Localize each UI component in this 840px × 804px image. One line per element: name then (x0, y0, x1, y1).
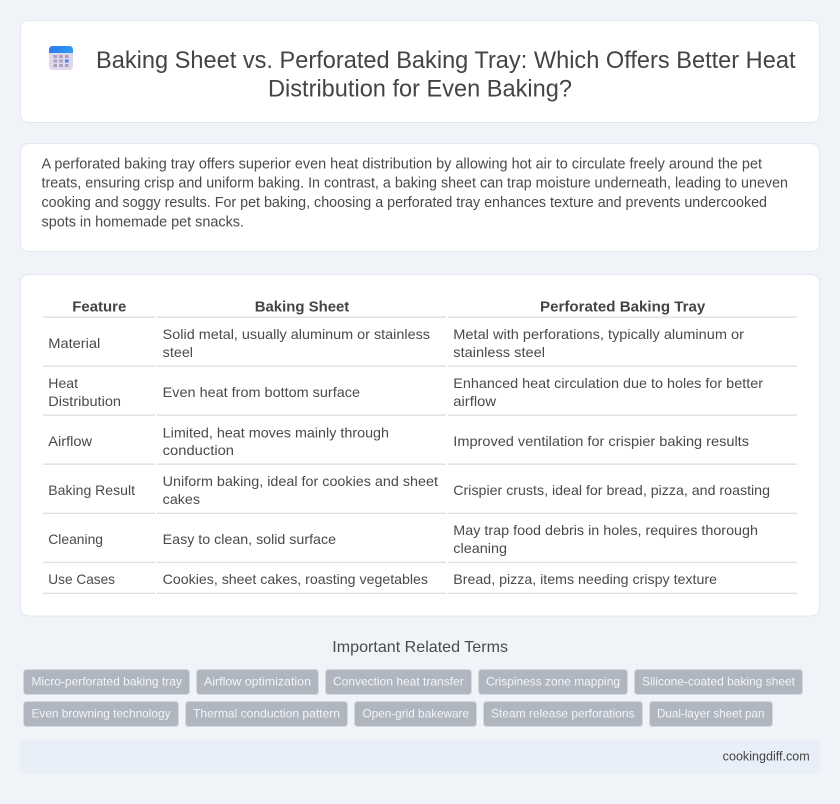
panel: intro paragraph: cooking and soggy results. For pet baking, choosing a perforated tray enhances texture and prevents undercooked (42, 195, 767, 211)
row: heat distribution: Heat (48, 375, 78, 391)
row: material: Solid metal, usually aluminum or stainless (163, 326, 430, 342)
related term tags (24, 670, 802, 726)
related term tags: Thermal conduction pattern (193, 707, 340, 721)
title (96, 47, 796, 102)
row: heat distribution: airflow (453, 393, 497, 409)
row: airflow: conduction (163, 442, 234, 458)
panel: intro paragraph: spots in homemade pet snacks. (42, 214, 244, 230)
row: baking result (48, 473, 770, 507)
table header row: Baking Sheet (255, 299, 349, 316)
panel: intro paragraph: A perforated baking tray offers superior even heat distribution by allowing hot air to circulate freely around the pet (42, 156, 762, 172)
table header row: Feature (72, 299, 126, 316)
title: Baking Sheet vs. Perforated Baking Tray: Which Offers Better Heat (96, 47, 796, 74)
row: heat distribution: Even heat from bottom surface (163, 384, 360, 400)
table header row (72, 299, 706, 316)
row: heat distribution (48, 375, 763, 409)
row: heat distribution: Distribution (48, 393, 121, 409)
row: use cases: Bread, pizza, items needing crispy texture (453, 571, 717, 587)
row: material: stainless steel (453, 344, 545, 360)
row: airflow: Improved ventilation for crispier baking results (453, 433, 749, 449)
related term tags: Micro-perforated baking tray (32, 675, 182, 689)
related term tags: Silicone-coated baking sheet (642, 675, 796, 689)
related term tags: Open-grid bakeware (362, 707, 469, 721)
row: baking result: Crispier crusts, ideal for bread, pizza, and roasting (453, 482, 770, 498)
row: cleaning: cleaning (453, 540, 507, 556)
row: cleaning: Cleaning (48, 531, 103, 547)
related term tags: Crispiness zone mapping (486, 675, 620, 689)
row: heat distribution: Enhanced heat circulation due to holes for better (453, 375, 763, 391)
row: use cases (48, 571, 717, 587)
footer bar: cookingdiff.com (723, 750, 810, 764)
related term tags: Dual-layer sheet pan (657, 707, 764, 721)
related term tags: Steam release perforations (491, 707, 634, 721)
row: baking result: cakes (163, 491, 200, 507)
row: airflow (48, 424, 749, 458)
heading: important related terms: Important Related Terms (332, 639, 508, 656)
footer bar (20, 740, 820, 774)
icon: calendar (49, 46, 73, 70)
row: material: steel (163, 344, 193, 360)
title: Distribution for Even Baking? (268, 76, 572, 102)
related term tags: Convection heat transfer (333, 675, 464, 689)
row: material: Metal with perforations, typically aluminum or (453, 326, 744, 342)
row: baking result: Baking Result (48, 482, 135, 498)
row: airflow: Limited, heat moves mainly through (163, 424, 389, 440)
panel: intro paragraph (20, 144, 820, 252)
row: use cases: Cookies, sheet cakes, roasting vegetables (163, 571, 428, 587)
row: airflow: Airflow (48, 433, 93, 449)
panel: comparison table (20, 274, 820, 616)
table header row: Perforated Baking Tray (540, 299, 706, 316)
row: cleaning: May trap food debris in holes, requires thorough (453, 522, 758, 538)
panel: title header (20, 20, 820, 122)
panel: intro paragraph: treats, ensuring crisp and uniform baking. In contrast, a baking sheet can trap moisture underneath, leading to uneven (42, 176, 788, 192)
related term tags: Airflow optimization (204, 675, 311, 689)
row: material (48, 326, 744, 360)
row: material: Material (48, 335, 100, 351)
row: cleaning: Easy to clean, solid surface (163, 531, 336, 547)
related term tags: Even browning technology (32, 707, 170, 721)
row: cleaning (48, 522, 758, 556)
row: use cases: Use Cases (48, 571, 115, 587)
row: baking result: Uniform baking, ideal for cookies and sheet (163, 473, 438, 489)
